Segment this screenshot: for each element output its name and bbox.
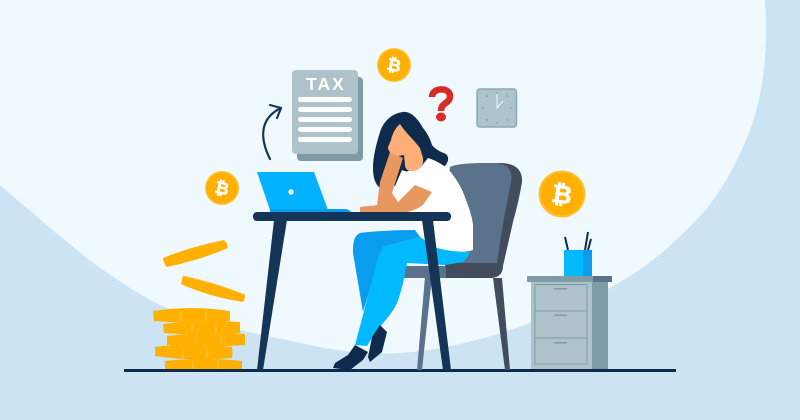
question mark — [432, 89, 450, 122]
arrow — [263, 105, 281, 159]
chair — [403, 163, 522, 370]
icon: bitcoin coin right — [538, 170, 586, 218]
t-shirt — [392, 158, 473, 252]
chair seat front — [403, 266, 446, 278]
woman — [333, 112, 473, 370]
icon: bitcoin coin right: ₿ — [550, 180, 574, 210]
icon: bitcoin coin left: ₿ — [213, 178, 231, 199]
chair back edge — [445, 163, 522, 278]
floor line — [124, 369, 676, 372]
laptop — [257, 172, 351, 213]
tax document — [292, 70, 363, 161]
wall clock — [477, 89, 516, 127]
tax document: TAX — [306, 74, 346, 94]
arm — [360, 152, 432, 212]
icon: bitcoin coin left — [205, 171, 239, 205]
coin stack — [153, 308, 245, 369]
front leg — [355, 237, 470, 346]
icon: bitcoin coin top: ₿ — [385, 55, 403, 76]
chair legs — [417, 277, 432, 370]
desk — [253, 212, 451, 370]
falling coins — [163, 240, 245, 302]
shoes — [333, 345, 368, 370]
icon: bitcoin coin top — [377, 48, 411, 82]
face and neck — [388, 124, 423, 171]
back leg — [353, 230, 420, 312]
chair back panel — [440, 163, 511, 263]
filing cabinet — [527, 276, 612, 369]
hair — [373, 112, 448, 188]
pencil cup — [564, 232, 592, 277]
